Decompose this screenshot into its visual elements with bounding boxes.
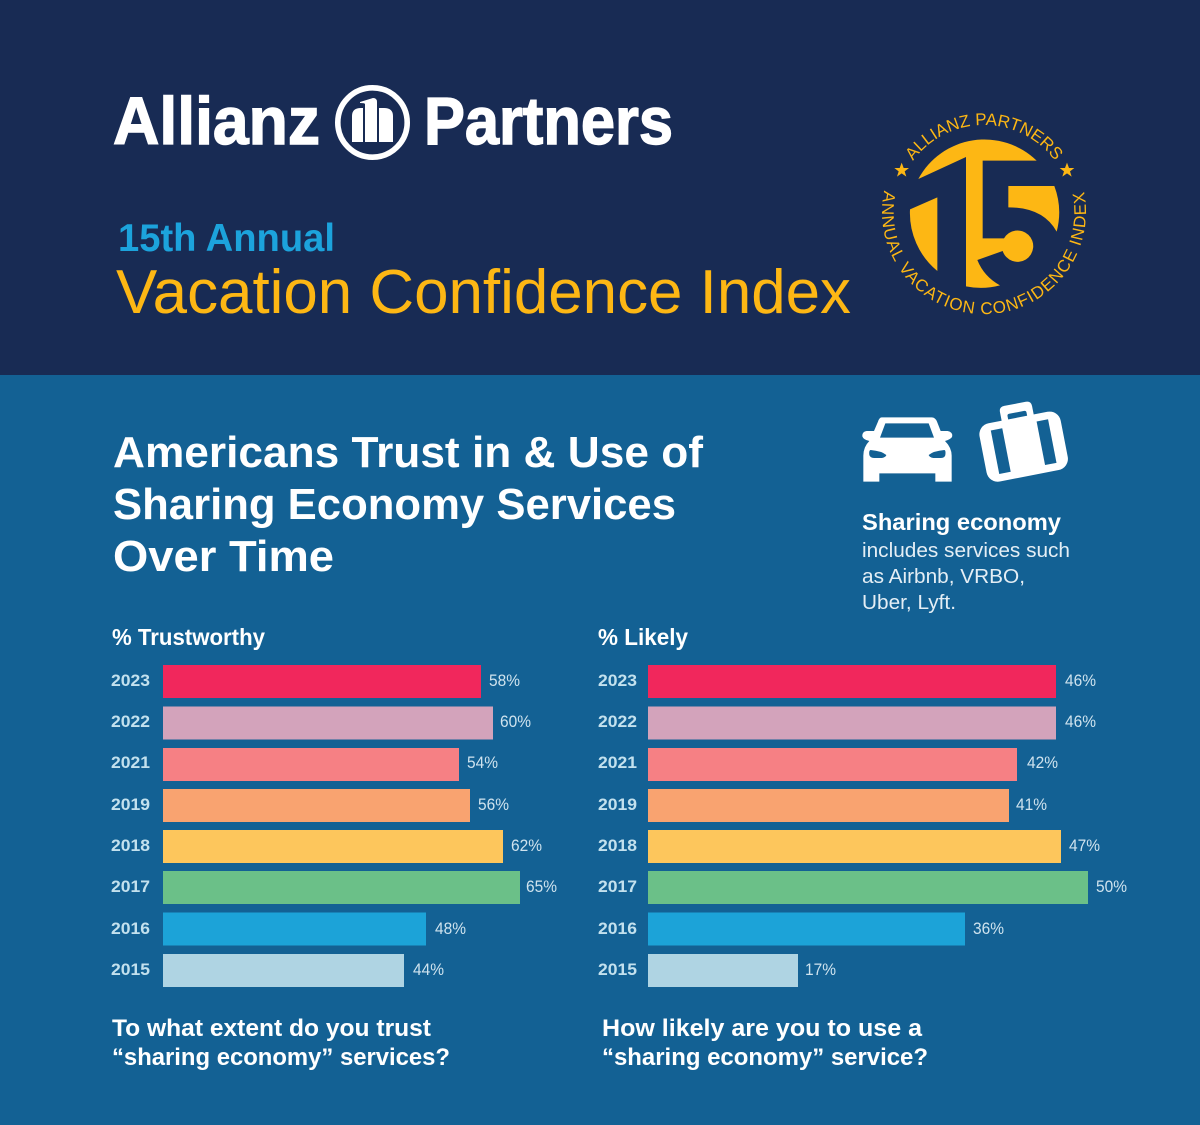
bar chart: % Likely: 41% (1016, 795, 1047, 814)
bar chart: % Likely: 46% (1065, 671, 1096, 690)
callout: sharing economy definition: Uber, Lyft. (862, 592, 956, 614)
bar chart: % Likely: 47% (1069, 836, 1100, 855)
bar chart: % Trustworthy: 2023 (111, 671, 150, 690)
bar chart: % Likely: 2018 (598, 836, 637, 855)
heading: Americans Trust in & Use of Sharing Economy Services Over Time: Sharing Economy Services (113, 480, 676, 529)
bar chart: % Trustworthy: 62% (511, 836, 542, 855)
bar chart: % Trustworthy: 54% (467, 753, 498, 772)
header background (0, 0, 1200, 375)
icon: car (862, 417, 952, 482)
bar chart: % Trustworthy: 58% (489, 671, 520, 690)
callout: sharing economy definition: as Airbnb, VRBO, (862, 566, 1025, 588)
bar chart: % Trustworthy: 48% (435, 919, 466, 938)
icon: suitcase (975, 396, 1070, 484)
bar chart: % Trustworthy: 2018 (111, 836, 150, 855)
bar chart: % Likely: 2015 (598, 960, 637, 979)
question: trust (112, 1015, 450, 1071)
logo: Allianz Partners (113, 84, 673, 159)
logo word: Partners: Partners (424, 84, 673, 159)
bar chart: % Trustworthy: 2016 (111, 919, 150, 938)
bar chart: % Likely: 17% (805, 960, 836, 979)
question: likelihood (602, 1015, 928, 1071)
bar chart: % Trustworthy: 60% (500, 712, 531, 731)
bar chart: % Trustworthy: 44% (413, 960, 444, 979)
bar chart: % Likely: 2019 (598, 795, 637, 814)
chart heading: % Trustworthy: % Trustworthy (112, 624, 265, 650)
bar chart: % Likely: 2017 (598, 877, 637, 896)
heading: Americans Trust in & Use of Sharing Economy Services Over Time: Americans Trust in & Use of (113, 428, 703, 477)
callout: sharing economy definition: includes services such (862, 540, 1070, 562)
bar chart: % Trustworthy: 2017 (111, 877, 150, 896)
bar chart: % Trustworthy: 65% (526, 877, 557, 896)
question: likelihood: How likely are you to use a (602, 1015, 923, 1042)
bar chart: % Likely: 2022 (598, 712, 637, 731)
bar chart: % Likely: 42% (1027, 753, 1058, 772)
bar chart: % Likely: 36% (973, 919, 1004, 938)
bar chart: % Likely: 46% (1065, 712, 1096, 731)
bar chart: % Trustworthy: 2021 (111, 753, 150, 772)
question: trust: “sharing economy” services? (112, 1044, 450, 1071)
bar chart: % Trustworthy: 2015 (111, 960, 150, 979)
title: Vacation Confidence Index: Vacation Confidence Index (116, 258, 851, 327)
callout: sharing economy definition: Sharing economy (862, 509, 1061, 535)
bar chart: % Trustworthy: 56% (478, 795, 509, 814)
subtitle: 15th Annual: 15th Annual (118, 217, 335, 260)
bar chart: % Likely: 2023 (598, 671, 637, 690)
icon: Allianz eagle roundel (338, 88, 407, 157)
callout: sharing economy definition (862, 509, 1070, 614)
heading: Americans Trust in & Use of Sharing Economy Services Over Time: Over Time (113, 532, 334, 581)
bar chart: % Trustworthy: 2022 (111, 712, 150, 731)
badge: 15 year anniversary seal (882, 113, 1086, 314)
main panel background (0, 375, 1200, 1125)
question: likelihood: “sharing economy” service? (602, 1044, 928, 1071)
logo word: Allianz: Allianz (113, 84, 320, 159)
question: trust: To what extent do you trust (112, 1015, 431, 1042)
bar chart: % Likely (598, 665, 1127, 987)
badge text: bottom arc: ANNUAL VACATION CONFIDENCE INDEX (882, 190, 1086, 314)
heading: Americans Trust in & Use of Sharing Economy Services Over Time (113, 428, 703, 581)
bar chart: % Likely: 50% (1096, 877, 1127, 896)
bar chart: % Trustworthy (111, 665, 557, 987)
bar chart: % Likely: 2016 (598, 919, 637, 938)
badge numeral 15 (894, 139, 1074, 288)
chart heading: % Likely: % Likely (598, 624, 688, 650)
bar chart: % Likely: 2021 (598, 753, 637, 772)
badge text: top arc: ALLIANZ PARTNERS (907, 113, 1062, 161)
bar chart: % Trustworthy: 2019 (111, 795, 150, 814)
